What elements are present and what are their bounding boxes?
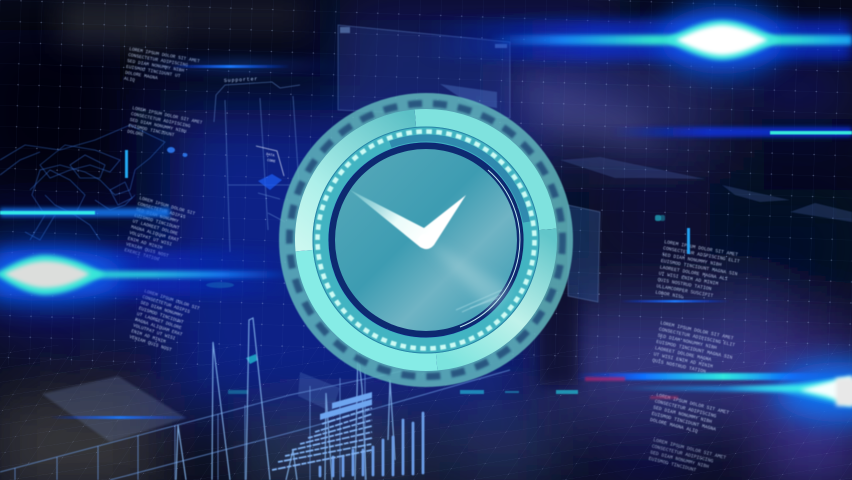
clock sheen	[426, 240, 512, 312]
technical chart frame with label	[214, 76, 300, 252]
text block: data columns right: SED DIAM NONUMMY NIBH	[649, 450, 710, 470]
text block: data columns left: SED DIAM NONUMMY	[140, 300, 184, 319]
text block: data columns left: MAGNA ALIQUAM ERAT	[134, 317, 183, 338]
bar chart: vertical bars	[320, 413, 423, 476]
text block: data columns right: EUISMOD TINCIDUNT MAGNA	[651, 411, 717, 433]
text block: data columns right: LOREM IPSUM DOLOR SIT AMET	[653, 437, 727, 461]
lens flare: left	[0, 249, 300, 301]
text block: data columns right	[648, 239, 741, 480]
text block: data columns right: UT WISI ENIM AD MINIM	[653, 351, 713, 370]
text block: data columns left: VOLUTPAT UT WISI	[129, 230, 173, 248]
clock face faint readouts	[456, 290, 502, 312]
clock inner dotted band	[295, 109, 557, 371]
text block: data columns left: EUISMOD TINCIDUNT	[128, 123, 175, 138]
light streak: thin horizontal flares	[0, 60, 852, 419]
text block: data columns right: EUISMOD TINCIDUNT	[648, 456, 697, 473]
text block: data columns left: MAGNA ALIQUAM ERAT	[130, 224, 180, 244]
text block: data columns right: CONSECTETUR ADIPISCING	[651, 443, 714, 465]
text block: data columns right: DOLORE MAGNA ALIQ	[649, 417, 698, 435]
text block: data columns right: UT WISI ENIM AD MINIM	[658, 271, 719, 287]
text block: data columns right: LOREM IPSUM DOLOR SIT AMET	[664, 239, 739, 258]
text block: data columns right: LAOREET DOLORE MAGNA ALI	[659, 264, 728, 282]
data table: translucent floor readout	[272, 372, 372, 470]
text block: data columns right: CONSECTETUR ADIPISCING	[654, 398, 717, 420]
text block: data columns right: SED DIAM NONUMMY NIBH	[661, 252, 722, 268]
text block: data columns left: DOLORE	[127, 129, 144, 138]
technical chart frame with label: Supporter	[224, 76, 258, 84]
panel: small screen right of clock	[568, 205, 600, 302]
text block: data columns right: SED DIAM NONUMMY NIBH	[652, 405, 713, 425]
technical chart frame with label: CORE	[267, 159, 276, 164]
text block: data columns right: LOREM IPSUM DOLOR SIT AMET	[656, 392, 730, 416]
text block: data columns left: CONSECTETUR ADIPISCING	[130, 111, 191, 129]
text block: data columns left: UT LAOREET DOLORE	[136, 311, 183, 331]
text block: data columns left: LOREM IPSUM DOLOR SIT AMET	[129, 46, 201, 64]
text block: data columns left: EUISMOD TINCIDUNT UT	[126, 64, 181, 79]
text block: data columns right: QUIS NOSTRUD TATION	[657, 277, 712, 292]
text block: data columns right: EUISMOD TINCIDUNT MAGNA SIN	[660, 258, 738, 277]
text block: data columns left: LOREM IPSUM DOLOR SIT	[143, 288, 201, 312]
floor perspective chart grid	[0, 365, 510, 480]
text block: data columns left: EUISMOD TINCIDUNT	[133, 212, 180, 231]
panel: translucent top screen	[338, 25, 510, 118]
text block: data columns left: ENIM AD MINIM	[130, 328, 167, 345]
panels: right floating slabs	[560, 157, 852, 222]
text block: data columns right: ULLAMCORPER SUSCIPIT	[656, 283, 714, 299]
text block: data columns right: LAOREET DOLORE MAGNA	[654, 345, 712, 363]
text block: data columns left: ALIQ	[123, 76, 136, 83]
text block: data columns left: VENIAM QUIS NOST	[125, 241, 170, 259]
clock dark bezel	[329, 143, 523, 337]
text block: data columns left: VENIAM QUIS NOST	[129, 334, 173, 353]
lens flare: bottom right	[620, 362, 852, 422]
text block: data columns left: SED DIAM NONUMMY NIBH	[129, 117, 187, 135]
text block: data columns right: QUIS NOSTRUD TATION	[652, 358, 706, 375]
text block: data columns left: LOREM IPSUM DOLOR SIT	[138, 195, 196, 217]
text block: data columns left	[123, 46, 203, 358]
clock outer ring with segmented ticks	[288, 102, 564, 378]
text block: data columns left: DOLORE MAGNA	[124, 70, 158, 81]
text block: data columns left: ENIM AD MINIM	[127, 236, 163, 251]
text block: data columns left: CONSECTETUR ADIPIS	[137, 201, 186, 220]
clock bezel thin highlight	[460, 170, 520, 327]
text block: data columns right: EUISMOD TINCIDUNT MAGNA SIN	[656, 339, 733, 361]
world map outline	[0, 125, 165, 240]
text block: data columns right: SED DIAM NONUMMY NIBH	[657, 333, 717, 351]
text block: data columns left: VOLUTPAT UT WISI	[132, 322, 176, 342]
panel: floor tablet	[42, 376, 186, 442]
text block: data columns left: CONSECTETUR ADIPIS	[142, 294, 191, 315]
text block: data columns left: EXERCI TATION	[124, 247, 160, 263]
clock face	[335, 149, 517, 331]
text block: data columns left: EUISMOD TINCIDUNT	[138, 305, 184, 326]
text block: data columns left: SED DIAM NONUMMY	[135, 207, 179, 225]
text block: data columns left: SED DIAM NONUMMY NIBH	[127, 58, 185, 74]
text block: data columns left: UT LAOREET DOLORE	[132, 218, 179, 237]
clock hands	[350, 190, 466, 249]
text block: data columns right: CONSECTETUR ADIPISCING ELIT	[658, 326, 736, 348]
text block: data columns left: CONSECTETUR ADIPISCING	[128, 52, 189, 68]
clock: large circular dial	[288, 102, 564, 378]
text block: data columns left: LOREM IPSUM DOLOR SIT AMET	[132, 105, 203, 126]
text block: data columns right: LOREM IPSUM DOLOR SIT AMET	[660, 320, 734, 342]
lens flare: top right	[420, 6, 852, 74]
text block: data columns right: LOBOR NISL	[655, 289, 684, 300]
technical chart frame with label: DATA	[266, 153, 276, 159]
text block: data columns right: CONSECTETUR ADIPISCING ELIT	[663, 245, 740, 265]
line chart: spikes	[176, 318, 395, 480]
blue data glows	[167, 147, 665, 394]
clock bright segmented band	[294, 108, 558, 372]
